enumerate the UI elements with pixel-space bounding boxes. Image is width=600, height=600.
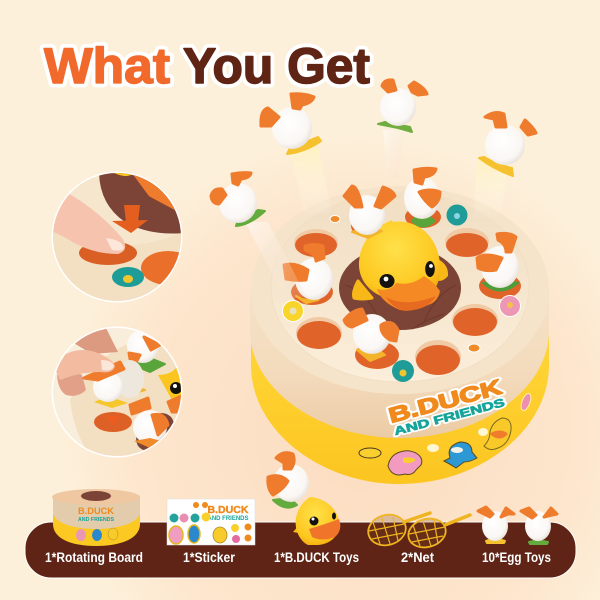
flying egg: left green foot xyxy=(211,173,265,226)
flying egg: top green foot xyxy=(378,80,427,132)
main toy: rotating board xyxy=(250,168,549,484)
flying egg: yellow foot left xyxy=(261,94,321,154)
item: rotating board xyxy=(52,489,140,546)
brown nest xyxy=(339,246,461,330)
detail circle: placing an egg xyxy=(50,325,184,460)
sticker characters on band xyxy=(359,392,533,475)
title: What xyxy=(44,38,170,94)
motion trails xyxy=(245,130,508,300)
item: rotating board: B.DUCK xyxy=(78,506,114,517)
toy eggs on board xyxy=(344,186,395,238)
item: sticker sheet xyxy=(167,499,255,545)
logo: B.DUCK and friends: AND FRIENDS xyxy=(393,397,507,438)
title xyxy=(44,38,370,94)
item labels: 10*Egg Toys xyxy=(482,550,551,565)
central duck xyxy=(354,220,448,311)
title: You Get xyxy=(183,38,370,94)
item: rotating board: AND FRIENDS xyxy=(78,517,115,523)
detail circle: pressing a hole xyxy=(52,172,182,302)
logo: B.DUCK and friends: B.DUCK xyxy=(386,376,504,428)
top surface xyxy=(271,192,529,382)
item labels: 1*B.DUCK Toys xyxy=(274,550,359,565)
item: sticker sheet: B.DUCK xyxy=(208,504,249,516)
yellow base xyxy=(251,320,549,484)
item: egg toys xyxy=(478,507,557,544)
bottom contents band xyxy=(25,522,576,578)
item labels: 1*Sticker xyxy=(183,550,236,565)
item labels: 2*Net xyxy=(401,550,434,565)
flying egg: right yellow foot xyxy=(479,113,536,176)
logo: B.DUCK and friends xyxy=(386,376,507,438)
stickers on top xyxy=(282,204,520,382)
item: nets xyxy=(365,511,470,551)
logo: B.DUCK and friends: B.DUCK xyxy=(386,376,504,428)
title: You Get xyxy=(183,38,370,94)
title: What xyxy=(44,38,170,94)
item labels xyxy=(45,550,551,565)
holes xyxy=(291,206,521,375)
item labels: 1*Rotating Board xyxy=(45,550,143,565)
logo: B.DUCK and friends: AND FRIENDS xyxy=(393,397,507,438)
item: sticker sheet: AND FRIENDS xyxy=(208,516,248,522)
item: egg above duck xyxy=(268,453,309,508)
item: B.DUCK toy xyxy=(293,497,340,545)
beige lid xyxy=(250,290,549,438)
